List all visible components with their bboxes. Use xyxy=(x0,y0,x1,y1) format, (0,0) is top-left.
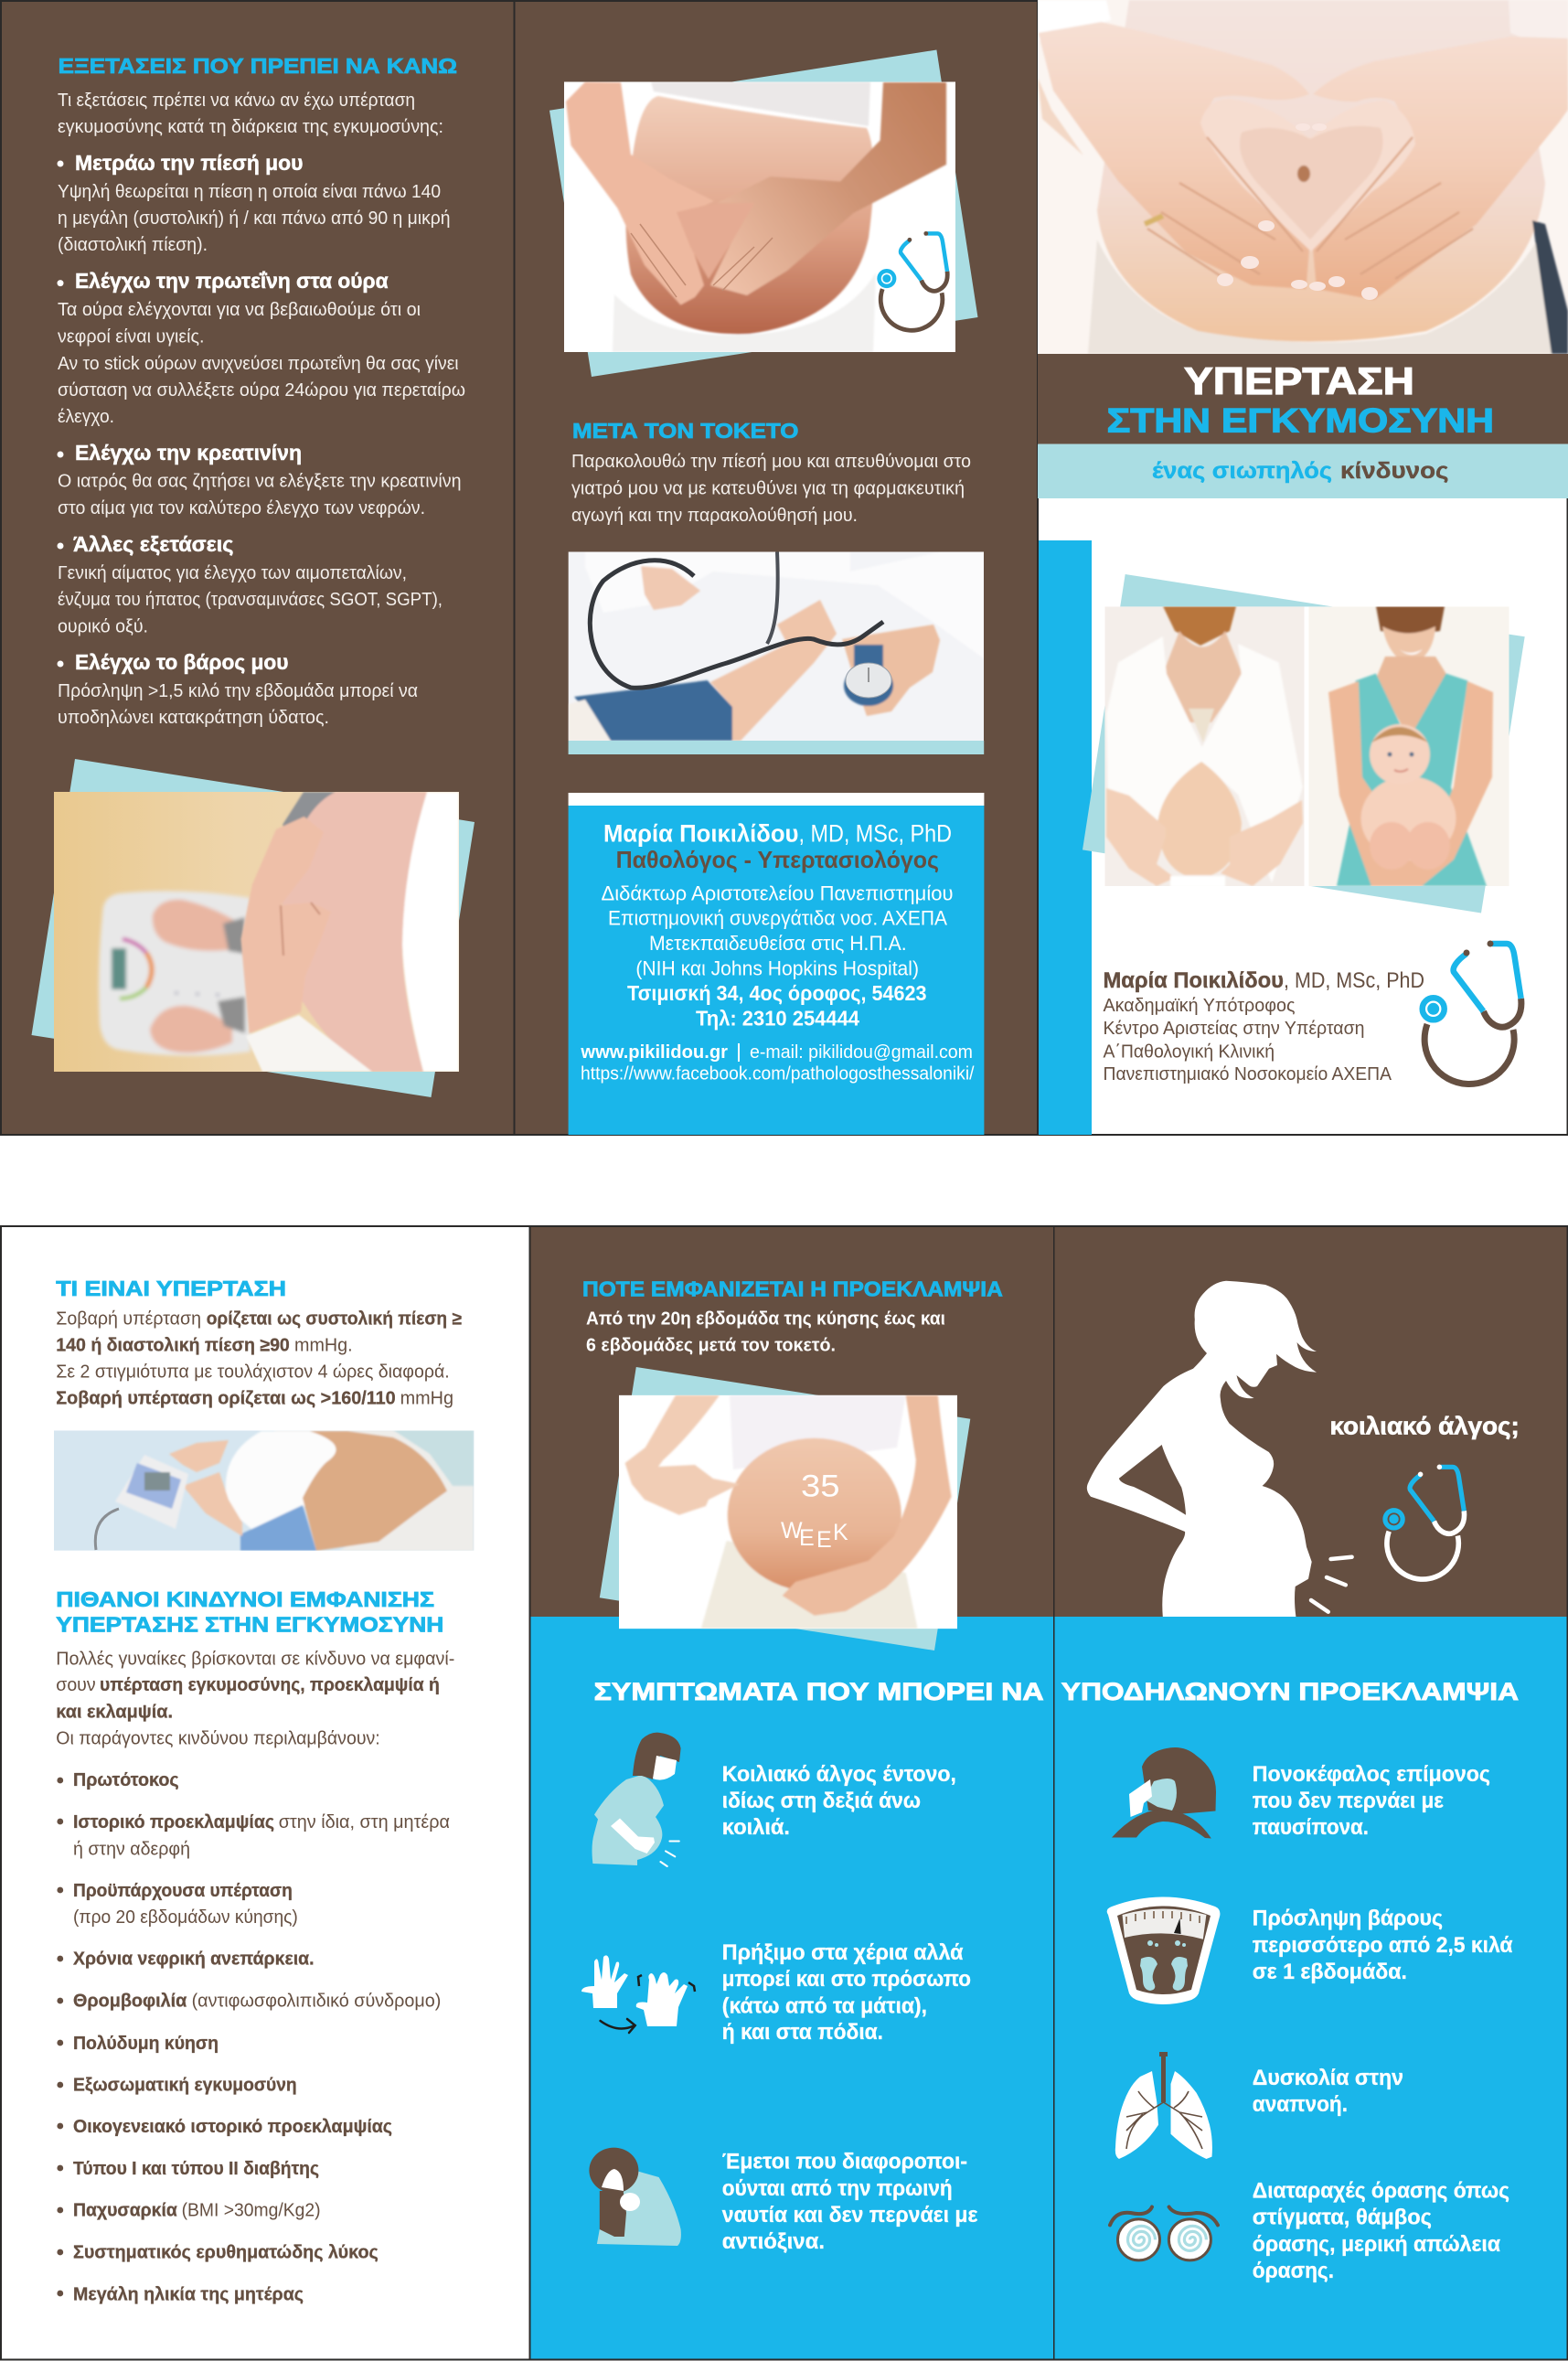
text block: definition: mmHg. xyxy=(294,1335,353,1355)
item: weight xyxy=(57,650,418,728)
text block: vomiting symptom: ούνται από την πρωινή xyxy=(722,2176,953,2201)
icon: headache xyxy=(1112,1747,1216,1838)
list: risk factors: Χρόνια νεφρική ανεπάρκεια. xyxy=(73,1950,315,1970)
photo: pregnant woman and mother with baby xyxy=(1083,574,1525,913)
text block: author xyxy=(1103,968,1424,1084)
item: creatinine: Ελέγχω την κρεατινίνη xyxy=(75,441,302,465)
text block: after birth: Παρακολουθώ την πίεσή μου και απευθύνομαι στο xyxy=(571,452,971,472)
web links: www.pikilidou.gr xyxy=(580,1042,728,1063)
text block: definition xyxy=(56,1309,462,1409)
doctor specialty: Παθολόγος - Υπερτασιολόγος xyxy=(616,846,939,873)
decorative blue strip xyxy=(1039,540,1092,1135)
panel: after birth xyxy=(571,419,971,526)
list: risk factors: (προ 20 εβδομάδων κύησης) xyxy=(73,1907,298,1928)
doctor credentials xyxy=(602,881,953,980)
text block: abdominal pain symptom: ιδίως στη δεξιά άνω xyxy=(722,1789,921,1813)
item: blood pressure: (διαστολική πίεση). xyxy=(58,235,208,255)
item: urine protein: Αν το stick ούρων ανιχνεύσει πρωτεΐνη θα σας γίνει xyxy=(58,354,459,374)
text block: swelling symptom: μπορεί και στο πρόσωπο xyxy=(722,1967,971,1992)
item: creatinine xyxy=(57,441,461,518)
list: risk factors: στην ίδια, στη μητέρα xyxy=(279,1812,450,1832)
text block: risk intro: υπέρταση εγκυμοσύνης, προεκλαμψία ή xyxy=(100,1675,440,1695)
subtitle banner xyxy=(1038,444,1568,498)
web links xyxy=(580,1042,975,1084)
label: abdominal pain: κοιλιακό άλγος; xyxy=(1329,1412,1520,1439)
text block: vision symptom: Διαταραχές όρασης όπως xyxy=(1253,2178,1509,2204)
item: urine protein xyxy=(57,269,465,427)
panel: when preeclampsia appears xyxy=(582,1277,1003,1355)
heading: risk factors xyxy=(56,1587,443,1637)
text block: vision symptom xyxy=(1253,2178,1509,2283)
text block: author: Μαρία Ποικιλίδου xyxy=(1103,968,1284,993)
heading: symptoms right: ΥΠΟΔΗΛΩΝΟΥΝ ΠΡΟΕΚΛΑΜΨΙΑ xyxy=(1061,1678,1519,1705)
text block: vomiting symptom: αντιόξινα. xyxy=(722,2229,825,2254)
text block: weight symptom: σε 1 εβδομάδα. xyxy=(1253,1960,1407,1984)
text block: swelling symptom: ή και στα πόδια. xyxy=(722,2020,883,2045)
photo: blood pressure measurement xyxy=(569,551,984,754)
text block: author: Ακαδημαϊκή Υπότροφος xyxy=(1103,996,1296,1016)
doctor name: Μαρία Ποικιλίδου xyxy=(603,820,799,848)
panel: top sheet background xyxy=(0,0,1568,1136)
item: creatinine: Ο ιατρός θα σας ζητήσει να ελέγξετε την κρεατινίνη xyxy=(58,471,461,491)
text block: author: , MD, MSc, PhD xyxy=(1284,968,1424,993)
panel: risk factors xyxy=(56,1587,454,2304)
heading: risk factors: ΠΙΘΑΝΟΙ ΚΙΝΔΥΝΟΙ ΕΜΦΑΝΙΣΗΣ xyxy=(56,1587,434,1611)
item: urine protein: σύσταση να συλλέξετε ούρα 24ώρου για περεταίρω xyxy=(58,380,465,401)
list: risk factors: (BMI >30mg/Kg2) xyxy=(182,2201,321,2221)
text block: definition: Σοβαρή υπέρταση xyxy=(56,1309,201,1330)
icon: swollen hands xyxy=(581,1955,695,2033)
text block: timing: 6 εβδομάδες μετά τον τοκετό. xyxy=(586,1335,836,1355)
item: weight: υποδηλώνει κατακράτηση ύδατος. xyxy=(58,708,329,728)
photo: belly with 35 week written xyxy=(600,1367,970,1651)
text on belly: 35 xyxy=(801,1469,839,1504)
list: risk factors: Εξωσωματική εγκυμοσύνη xyxy=(73,2076,297,2096)
doctor credentials: Μετεκπαιδευθείσα στις Η.Π.Α. xyxy=(649,932,907,955)
doctor name: , MD, MSc, PhD xyxy=(799,820,952,848)
heading: symptoms left: ΣΥΜΠΤΩΜΑΤΑ ΠΟΥ ΜΠΟΡΕΙ ΝΑ xyxy=(594,1678,1044,1705)
text block: definition: Σε 2 στιγμιότυπα με τουλάχιστον 4 ώρες διαφορά. xyxy=(56,1362,450,1383)
text block: definition: Σοβαρή υπέρταση ορίζεται ως >160/110 xyxy=(56,1389,396,1409)
item: blood pressure xyxy=(57,151,450,255)
text block: breathing symptom: αναπνοή. xyxy=(1253,2092,1348,2117)
item: weight: Πρόσληψη >1,5 κιλό την εβδομάδα μπορεί να xyxy=(58,681,418,701)
icon: stethoscope xyxy=(880,231,947,330)
text block: weight symptom: Πρόσληψη βάρους xyxy=(1253,1907,1443,1931)
text block: breathing symptom xyxy=(1253,2066,1403,2117)
list: risk factors xyxy=(57,1770,450,2304)
text block: vomiting symptom: Έμετοι που διαφοροποι- xyxy=(722,2150,967,2174)
text block: weight symptom xyxy=(1253,1907,1513,1984)
icon: blurred vision eyes xyxy=(1110,2207,1218,2260)
title line 2: ΣΤΗΝ ΕΓΚΥΜΟΣΥΝΗ xyxy=(1107,402,1494,439)
list: risk factors: (αντιφωσφολιπιδικό σύνδρομο) xyxy=(192,1992,441,2012)
icon: woman with abdominal pain xyxy=(592,1733,681,1866)
text block: definition: ορίζεται ως συστολική πίεση ≥ xyxy=(207,1309,462,1330)
item: urine protein: Ελέγχω την πρωτεΐνη στα ούρα xyxy=(75,269,389,293)
panel: what is hypertension xyxy=(56,1277,462,1409)
text block: headache symptom: που δεν περνάει με xyxy=(1253,1789,1444,1813)
list: risk factors: Τύπου Ι και τύπου ΙΙ διαβήτης xyxy=(73,2159,319,2179)
text block: after birth xyxy=(571,452,971,526)
item: other tests: ένζυμα του ήπατος (τρανσαμινάσες SGOT, SGPT), xyxy=(58,590,443,610)
list: risk factors: Συστηματικός ερυθηματώδης λύκος xyxy=(73,2243,379,2263)
item: blood pressure: η μεγάλη (συστολική) ή / και πάνω από 90 η μικρή xyxy=(58,208,450,229)
item: other tests: ουρικό οξύ. xyxy=(58,616,148,636)
text on belly: WEEK xyxy=(781,1518,848,1553)
text block: intro xyxy=(58,91,443,137)
text block: author: Α΄Παθολογική Κλινική xyxy=(1103,1042,1275,1062)
list: risk factors: Προϋπάρχουσα υπέρταση xyxy=(73,1881,293,1901)
text block: risk intro xyxy=(56,1649,454,1748)
doctor credentials: Επιστημονική συνεργάτιδα νοσ. ΑΧΕΠΑ xyxy=(608,907,947,930)
item: blood pressure: Υψηλή θεωρείται η πίεση η οποία είναι πάνω 140 xyxy=(58,182,441,202)
text block: after birth: αγωγή και την παρακολούθησή μου. xyxy=(571,506,858,526)
list: risk factors: ή στην αδερφή xyxy=(73,1840,190,1860)
text block: after birth: γιατρό μου να με κατευθύνει για τη φαρμακευτική xyxy=(571,479,965,499)
address and phone xyxy=(627,981,927,1031)
photo: cover hands forming heart xyxy=(1038,0,1568,354)
item: other tests: Άλλες εξετάσεις xyxy=(73,532,234,556)
item: other tests xyxy=(57,532,443,636)
item: creatinine: στο αίμα για τον καλύτερο έλεγχο των νεφρών. xyxy=(58,498,425,518)
photo: pregnant belly with heart-shaped hands xyxy=(549,49,978,377)
address and phone: Τσιμισκή 34, 4ος όροφος, 54623 xyxy=(627,981,927,1005)
text block: author: Πανεπιστημιακό Νοσοκομείο ΑΧΕΠΑ xyxy=(1103,1064,1392,1084)
list: risk factors: Οικογενειακό ιστορικό προεκλαμψίας xyxy=(73,2117,392,2137)
photo: pregnant woman on scale xyxy=(31,759,475,1097)
text block: definition: mmHg xyxy=(400,1389,453,1409)
web links: https://www.facebook.com/pathologosthessaloniki/ xyxy=(581,1064,975,1084)
doctor name xyxy=(603,820,952,848)
heading: after birth: ΜΕΤΑ ΤΟΝ ΤΟΚΕΤΟ xyxy=(572,419,799,443)
icon: vomiting woman xyxy=(589,2148,681,2246)
list: risk factors: Μεγάλη ηλικία της μητέρας xyxy=(73,2284,304,2304)
list: risk factors: Πρωτότοκος xyxy=(73,1770,179,1790)
item: weight: Ελέγχω το βάρος μου xyxy=(75,650,289,674)
text block: risk intro: Οι παράγοντες κινδύνου περιλαμβάνουν: xyxy=(56,1728,380,1748)
text block: abdominal pain symptom: κοιλιά. xyxy=(722,1815,790,1840)
text block: abdominal pain symptom: Κοιλιακό άλγος έντονο, xyxy=(722,1762,956,1787)
text block: intro: Τι εξετάσεις πρέπει να κάνω αν έχω υπέρταση xyxy=(58,91,415,111)
item: blood pressure: Μετράω την πίεσή μου xyxy=(75,151,304,175)
text on belly xyxy=(781,1474,848,1547)
text block: definition: 140 ή διαστολική πίεση ≥90 xyxy=(56,1335,290,1355)
text block: intro: εγκυμοσύνης κατά τη διάρκεια της εγκυμοσύνης: xyxy=(58,117,443,137)
text block: breathing symptom: Δυσκολία στην xyxy=(1253,2066,1403,2090)
panel: contact card xyxy=(569,793,984,1135)
list: risk factors: Πολύδυμη κύηση xyxy=(73,2034,219,2054)
pain marks xyxy=(1311,1557,1352,1612)
item: other tests: Γενική αίματος για έλεγχο των αιμοπεταλίων, xyxy=(58,563,407,583)
text block: risk intro: και εκλαμψία. xyxy=(56,1702,173,1722)
list: risk factors: Θρομβοφιλία xyxy=(73,1992,187,2012)
icon: stethoscope xyxy=(1423,940,1521,1084)
text block: timing: Από την 20η εβδομάδα της κύησης έως και xyxy=(586,1309,945,1329)
subtitle banner: ένας σιωπηλός xyxy=(1152,458,1332,484)
item: urine protein: νεφροί είναι υγιείς. xyxy=(58,327,205,347)
list: risk factors: Παχυσαρκία xyxy=(73,2201,177,2221)
text block: swelling symptom: (κάτω από τα μάτια), xyxy=(722,1993,927,2019)
heading: examinations: ΕΞΕΤΑΣΕΙΣ ΠΟΥ ΠΡΕΠΕΙ ΝΑ ΚΑΝΩ xyxy=(59,54,457,78)
text block: abdominal pain symptom xyxy=(722,1762,956,1840)
text block: author: Κέντρο Αριστείας στην Υπέρταση xyxy=(1103,1019,1364,1039)
text block: headache symptom xyxy=(1253,1762,1490,1840)
text block: weight symptom: περισσότερο από 2,5 κιλά xyxy=(1253,1933,1513,1958)
title banner xyxy=(1038,354,1568,444)
heading: when preeclampsia appears: ΠΟΤΕ ΕΜΦΑΝΙΖΕΤΑΙ Η ΠΡΟΕΚΛΑΜΨΙΑ xyxy=(582,1277,1003,1300)
text block: vision symptom: όρασης, μερική απώλεια xyxy=(1253,2232,1500,2257)
text block: vomiting symptom xyxy=(722,2150,978,2254)
title line 1: ΥΠΕΡΤΑΣΗ xyxy=(1184,359,1414,402)
doctor credentials: Διδάκτωρ Αριστοτελείου Πανεπιστημίου xyxy=(602,881,953,904)
text block: vomiting symptom: ναυτία και δεν περνάει με xyxy=(722,2203,978,2227)
text block: risk intro: σουν xyxy=(56,1675,96,1695)
illustration: pregnant woman silhouette xyxy=(1087,1281,1352,1617)
text block: risk intro: Πολλές γυναίκες βρίσκονται σε κίνδυνο να εμφανί- xyxy=(56,1649,454,1669)
doctor credentials: (NIH και Johns Hopkins Hospital) xyxy=(635,957,919,980)
panel: examinations text xyxy=(57,54,465,728)
item: urine protein: έλεγχο. xyxy=(58,407,114,427)
web links: e-mail: pikilidou@gmail.com xyxy=(750,1042,973,1063)
subtitle banner: κίνδυνος xyxy=(1340,458,1448,484)
text block: swelling symptom: Πρήξιμο στα χέρια αλλά xyxy=(722,1940,964,1965)
icon: lungs xyxy=(1115,2052,1212,2159)
text block: headache symptom: παυσίπονα. xyxy=(1253,1815,1369,1840)
heading: risk factors: ΥΠΕΡΤΑΣΗΣ ΣΤΗΝ ΕΓΚΥΜΟΣΥΝΗ xyxy=(56,1613,443,1637)
text block: vision symptom: στίγματα, θάμβος xyxy=(1253,2205,1432,2229)
text block: swelling symptom xyxy=(722,1940,971,2045)
icon: weighing scale xyxy=(1107,1896,1220,2004)
address and phone: Τηλ: 2310 254444 xyxy=(696,1007,859,1031)
heading: what is hypertension: ΤΙ ΕΙΝΑΙ ΥΠΕΡΤΑΣΗ xyxy=(56,1277,286,1300)
icon: stethoscope white xyxy=(1385,1465,1465,1579)
photo: pregnant woman with BP monitor xyxy=(54,1430,474,1551)
list: risk factors: Ιστορικό προεκλαμψίας xyxy=(73,1812,274,1832)
text block: timing xyxy=(586,1309,945,1355)
item: urine protein: Τα ούρα ελέγχονται για να βεβαιωθούμε ότι οι xyxy=(58,300,421,320)
panel: bottom sheet background xyxy=(0,1225,1568,2361)
text block: vision symptom: όρασης. xyxy=(1253,2259,1334,2283)
text block: headache symptom: Πονοκέφαλος επίμονος xyxy=(1253,1762,1490,1787)
